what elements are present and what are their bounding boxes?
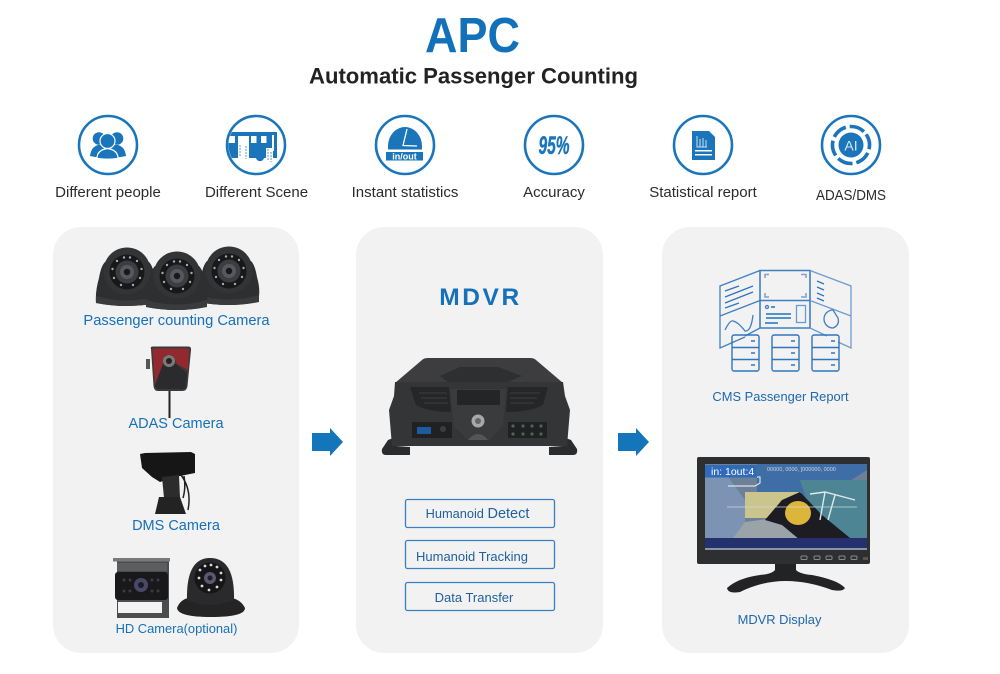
- arrow: cameras to MDVR: [312, 428, 343, 456]
- panel: MDVR: [356, 227, 603, 653]
- icon: HD cameras: [113, 558, 245, 618]
- label: ADAS camera: ADAS Camera: [128, 416, 224, 432]
- feature: Instant statistics: Instant statistics: [352, 184, 458, 201]
- feature: Statistical report: Statistical report: [649, 184, 758, 201]
- icon: MDVR display: in: 1out:4: [711, 466, 754, 478]
- feature: Different people: [55, 116, 161, 201]
- icon: MDVR display: [697, 457, 870, 592]
- icon: bus scene: [228, 132, 277, 162]
- feature: Different people: Different people: [55, 184, 161, 201]
- panel: outputs: [662, 227, 909, 653]
- icon: CMS dashboard: [720, 270, 851, 371]
- icon: MDVR display: 00000, 0000, ]000000, 0000: [767, 467, 836, 473]
- panel: cameras: [53, 227, 299, 653]
- feature: Accuracy: Accuracy: [523, 184, 585, 201]
- feature: Different Scene: Different Scene: [205, 184, 308, 201]
- label: DMS camera: DMS Camera: [132, 518, 221, 534]
- icon: MDVR device: [382, 358, 577, 455]
- box: humanoid tracking: Humanoid Tracking: [416, 549, 528, 564]
- title: APC: [425, 9, 520, 63]
- icon: ADAS camera: [146, 346, 191, 418]
- box: humanoid detect: Humanoid Detect: [426, 506, 529, 522]
- feature: ADAS/DMS: ADAS/DMS: [816, 187, 886, 204]
- box: humanoid detect: [406, 500, 554, 528]
- label: CMS report: CMS Passenger Report: [712, 389, 849, 404]
- label: passenger counting camera: Passenger counting Camera: [83, 313, 270, 329]
- box: humanoid tracking: [406, 540, 554, 568]
- box: data transfer: [406, 582, 554, 610]
- icon: people: [90, 132, 126, 159]
- heading: MDVR: MDVR: [439, 284, 522, 311]
- icon: DMS camera: [140, 452, 195, 514]
- label: MDVR display: MDVR Display: [738, 612, 822, 627]
- feature: Statistical report: [649, 116, 758, 201]
- feature: Instant statistics: [352, 116, 458, 201]
- icon: 95%: 95%: [538, 132, 570, 160]
- arrow: MDVR to outputs: [618, 428, 649, 456]
- feature: Different Scene: [205, 116, 308, 201]
- feature: Accuracy: [523, 116, 585, 201]
- subtitle: Automatic Passenger Counting: [309, 64, 638, 88]
- icon: AI ring: AI: [844, 138, 858, 154]
- box: data transfer: Data Transfer: [435, 590, 514, 605]
- icon: in/out clock: in/out: [392, 152, 417, 162]
- label: HD camera: HD Camera(optional): [116, 621, 237, 636]
- icon: passenger counting cameras: [96, 246, 259, 310]
- icon: report document: [692, 131, 715, 160]
- feature: ADAS/DMS: [816, 116, 886, 204]
